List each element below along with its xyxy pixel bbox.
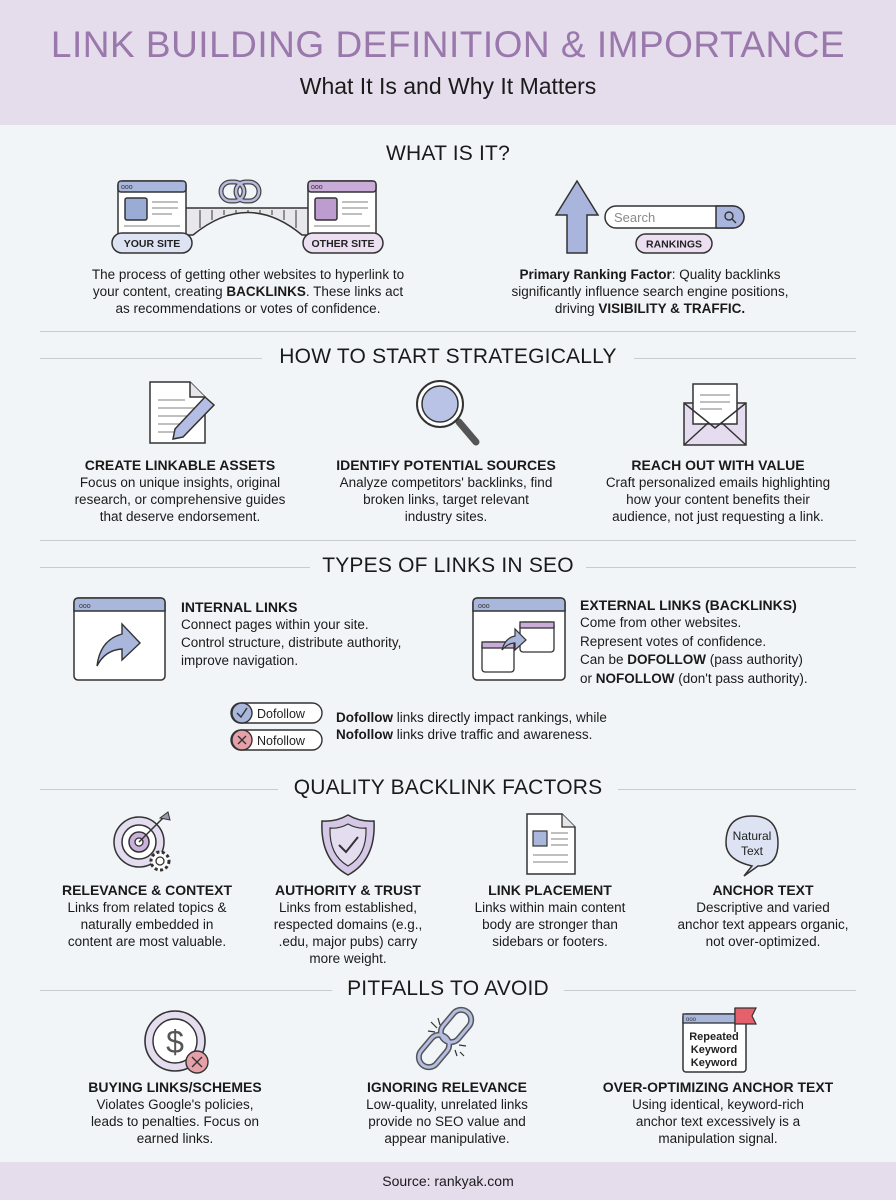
column: authority <box>274 882 422 966</box>
icon: bridge between sites: ooo <box>121 184 133 191</box>
text: internal links: Connect pages within your site. <box>181 617 369 632</box>
icon: speech bubble natural text: Natural <box>733 829 771 843</box>
column: identify sources <box>336 457 556 524</box>
legend pills: dofollow / nofollow: Dofollow <box>257 707 306 721</box>
column: buying links: earned links. <box>137 1131 213 1146</box>
column: relevance <box>62 882 232 949</box>
column: identify sources: industry sites. <box>405 509 487 524</box>
column: over-optimizing: manipulation signal. <box>658 1131 778 1146</box>
column: over-optimizing: OVER-OPTIMIZING ANCHOR TEXT <box>603 1079 833 1095</box>
text: dofollow explanation: Dofollow links directly impact rankings, while <box>336 710 607 725</box>
icon: document with pencil <box>149 381 215 444</box>
icon: speech bubble natural text: Text <box>741 844 764 858</box>
header band <box>0 0 896 125</box>
footer: Source: rankyak.com <box>382 1173 514 1189</box>
column: placement: Links within main content <box>475 900 625 915</box>
section heading: quality factors: QUALITY BACKLINK FACTORS <box>294 776 602 799</box>
legend pills: dofollow / nofollow <box>230 702 323 751</box>
column: create linkable assets: research, or comprehensive guides <box>75 492 285 507</box>
column: create linkable assets: that deserve endorsement. <box>100 509 260 524</box>
icon: external link windows: ooo <box>478 603 490 610</box>
column: over-optimizing <box>603 1079 834 1146</box>
text: internal links: improve navigation. <box>181 653 298 668</box>
text: definition: as recommendations or votes of confidence. <box>116 301 380 316</box>
column: relevance: naturally embedded in <box>81 917 213 932</box>
icon: ranking arrow and search: Search <box>614 210 655 225</box>
icon: bridge between sites: ooo <box>311 184 323 191</box>
section heading: pitfalls: PITFALLS TO AVOID <box>347 977 549 1000</box>
column: relevance: RELEVANCE & CONTEXT <box>62 882 232 898</box>
column: over-optimizing: anchor text excessively is a <box>636 1114 800 1129</box>
column: reach out: how your content benefits their <box>626 492 810 507</box>
text: external links: EXTERNAL LINKS (BACKLINKS) <box>580 597 797 613</box>
column: anchor text: Descriptive and varied <box>696 900 830 915</box>
icon: repeated keyword window with flag: Keyword <box>691 1044 737 1056</box>
text: ranking factor: significantly influence search engine positions, <box>512 284 788 299</box>
text: internal links: Control structure, distribute authority, <box>181 635 401 650</box>
icon: shield <box>321 814 375 876</box>
text: external links: Come from other websites. <box>580 615 741 630</box>
text: dofollow explanation: Nofollow links drive traffic and awareness. <box>336 727 592 742</box>
text: internal links <box>181 599 401 668</box>
column: ignoring relevance: Low-quality, unrelated links <box>366 1097 528 1112</box>
column: identify sources: IDENTIFY POTENTIAL SOURCES <box>336 457 556 473</box>
section heading: how to start: HOW TO START STRATEGICALLY <box>279 345 617 368</box>
column: ignoring relevance: appear manipulative. <box>384 1131 510 1146</box>
column: buying links <box>88 1079 262 1146</box>
text: definition: your content, creating BACKLINKS. These links act <box>93 284 403 299</box>
subtitle: What It Is and Why It Matters <box>300 73 596 99</box>
section heading: types of links: TYPES OF LINKS IN SEO <box>322 554 574 577</box>
column: relevance: Links from related topics & <box>67 900 227 915</box>
column: reach out <box>606 457 830 524</box>
column: anchor text: ANCHOR TEXT <box>712 882 814 898</box>
column: authority: Links from established, <box>279 900 417 915</box>
text: external links: or NOFOLLOW (don't pass authority). <box>580 670 808 686</box>
icon: speech bubble natural text <box>725 815 779 877</box>
column: placement: body are stronger than <box>482 917 618 932</box>
column: authority: AUTHORITY & TRUST <box>275 882 421 898</box>
column: placement: sidebars or footers. <box>492 934 608 949</box>
column: ignoring relevance: provide no SEO value and <box>368 1114 526 1129</box>
icon: internal link window <box>73 597 166 681</box>
text: external links <box>580 597 808 686</box>
icon: dollar coin with x: $ <box>166 1024 184 1060</box>
column: ignoring relevance: IGNORING RELEVANCE <box>367 1079 527 1095</box>
column: reach out: REACH OUT WITH VALUE <box>631 457 805 473</box>
text: internal links: INTERNAL LINKS <box>181 599 297 615</box>
text: dofollow explanation <box>336 710 607 742</box>
icon: repeated keyword window with flag: Keyword <box>691 1057 737 1069</box>
column: create linkable assets: CREATE LINKABLE ASSETS <box>85 457 275 473</box>
text: definition <box>92 267 404 316</box>
icon: magnifier <box>416 380 480 446</box>
column: create linkable assets <box>75 457 285 524</box>
title: LINK BUILDING DEFINITION & IMPORTANCE <box>51 24 845 65</box>
column: authority: .edu, major pubs) carry <box>279 934 417 949</box>
column: anchor text: not over-optimized. <box>706 934 820 949</box>
icon: page layout <box>526 813 576 875</box>
icon: envelope <box>683 383 747 446</box>
column: buying links: BUYING LINKS/SCHEMES <box>88 1079 262 1095</box>
icon: external link windows <box>472 597 566 681</box>
legend pills: dofollow / nofollow: Nofollow <box>257 734 306 748</box>
column: authority: more weight. <box>309 951 387 966</box>
footer <box>0 1162 896 1200</box>
icon: internal link window: ooo <box>79 603 91 610</box>
column: create linkable assets: Focus on unique insights, original <box>80 475 280 490</box>
column: relevance: content are most valuable. <box>68 934 226 949</box>
column: anchor text <box>677 882 849 949</box>
icon: bridge between sites <box>111 180 384 254</box>
text: ranking factor: Primary Ranking Factor: Quality backlinks <box>519 267 781 282</box>
column: placement <box>475 882 626 949</box>
column: identify sources: broken links, target relevant <box>363 492 529 507</box>
column: reach out: Craft personalized emails highlighting <box>606 475 830 490</box>
text: external links: Can be DOFOLLOW (pass authority) <box>580 652 803 667</box>
icon: bridge between sites: YOUR SITE <box>124 238 180 250</box>
column: anchor text: anchor text appears organic, <box>677 917 849 932</box>
column: buying links: Violates Google's policies, <box>97 1097 253 1112</box>
column: buying links: leads to penalties. Focus on <box>91 1114 259 1129</box>
text: ranking factor <box>512 267 788 316</box>
icon: ranking arrow and search: RANKINGS <box>646 238 702 250</box>
section heading: what is it: WHAT IS IT? <box>386 142 510 165</box>
icon: target with gear <box>113 811 171 872</box>
icon: repeated keyword window with flag: ooo <box>686 1017 697 1023</box>
column: over-optimizing: Using identical, keyword-rich <box>632 1097 804 1112</box>
column: placement: LINK PLACEMENT <box>488 882 612 898</box>
icon: ranking arrow and search <box>554 180 745 254</box>
column: reach out: audience, not just requesting a link. <box>612 509 824 524</box>
column: authority: respected domains (e.g., <box>274 917 422 932</box>
column: ignoring relevance <box>366 1079 528 1146</box>
text: ranking factor: driving VISIBILITY & TRAFFIC. <box>555 301 745 316</box>
text: external links: Represent votes of confidence. <box>580 634 766 648</box>
icon: repeated keyword window with flag: Repeated <box>689 1031 739 1043</box>
icon: bridge between sites: OTHER SITE <box>311 238 375 250</box>
text: definition: The process of getting other websites to hyperlink to <box>92 267 404 282</box>
column: identify sources: Analyze competitors' backlinks, find <box>340 475 552 490</box>
